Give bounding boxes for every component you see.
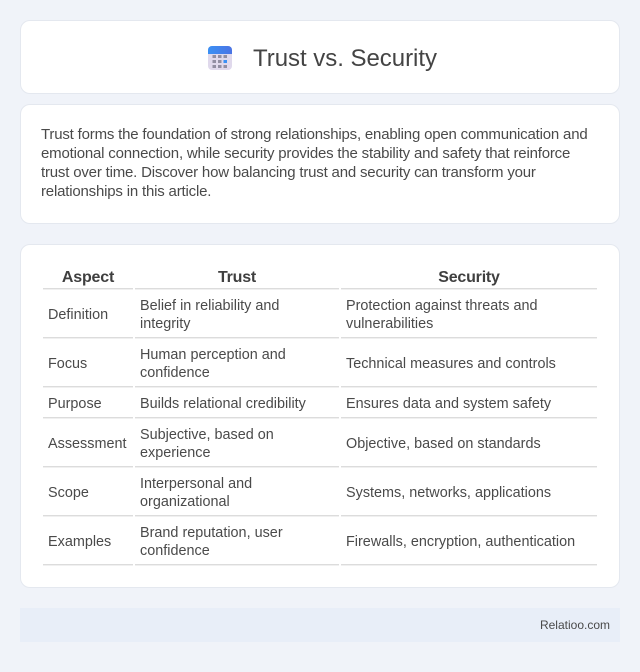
- row: Definition: integrity: [140, 316, 190, 332]
- row: Focus: Focus: [48, 356, 87, 372]
- row: Purpose: Purpose: [48, 396, 102, 412]
- row: Purpose: [48, 396, 551, 412]
- intro text: Trust forms the foundation of strong relationships, enabling open communication and: [41, 126, 588, 143]
- row: Examples: Brand reputation, user: [140, 525, 283, 541]
- row: Assessment: Objective, based on standards: [346, 436, 541, 452]
- table header: Trust: Trust: [218, 269, 256, 286]
- intro text: trust over time. Discover how balancing trust and security can transform your: [41, 164, 536, 181]
- row: Scope: organizational: [140, 494, 230, 510]
- title: Trust vs. Security: [253, 45, 437, 72]
- row: Scope: [48, 476, 551, 510]
- row: Focus: Human perception and: [140, 347, 286, 363]
- row: Assessment: Subjective, based on: [140, 427, 274, 443]
- row: Assessment: Assessment: [48, 436, 126, 452]
- row: Examples: Firewalls, encryption, authentication: [346, 534, 575, 550]
- intro text: relationships in this article.: [41, 183, 211, 200]
- row: Purpose: Builds relational credibility: [140, 396, 306, 412]
- table panel: [20, 244, 620, 588]
- row: Assessment: [48, 427, 541, 461]
- row: Focus: confidence: [140, 365, 210, 381]
- table header: Security: Security: [438, 269, 500, 286]
- table header: Aspect: Aspect: [62, 269, 114, 286]
- footer text: Relatioo.com: [540, 618, 610, 632]
- row: Definition: vulnerabilities: [346, 316, 433, 332]
- row: Definition: [48, 298, 538, 332]
- footer bar: [20, 608, 620, 642]
- row: Definition: Protection against threats and: [346, 298, 538, 314]
- row: Scope: Systems, networks, applications: [346, 485, 551, 501]
- row: Purpose: Ensures data and system safety: [346, 396, 551, 412]
- row: Definition: Belief in reliability and: [140, 298, 279, 314]
- icon: calendar: [208, 46, 232, 70]
- row: Scope: Interpersonal and: [140, 476, 252, 492]
- intro panel: [20, 104, 620, 224]
- header card: [20, 20, 620, 94]
- intro text: [41, 126, 588, 200]
- row: Focus: Technical measures and controls: [346, 356, 556, 372]
- row: Focus: [48, 347, 556, 381]
- intro text: emotional connection, while security provides the stability and safety that reinforce: [41, 145, 570, 162]
- row: Examples: Examples: [48, 534, 111, 550]
- row: Definition: Definition: [48, 307, 108, 323]
- row: Examples: confidence: [140, 543, 210, 559]
- row: Assessment: experience: [140, 445, 211, 461]
- row: Examples: [48, 525, 575, 559]
- row: Scope: Scope: [48, 485, 89, 501]
